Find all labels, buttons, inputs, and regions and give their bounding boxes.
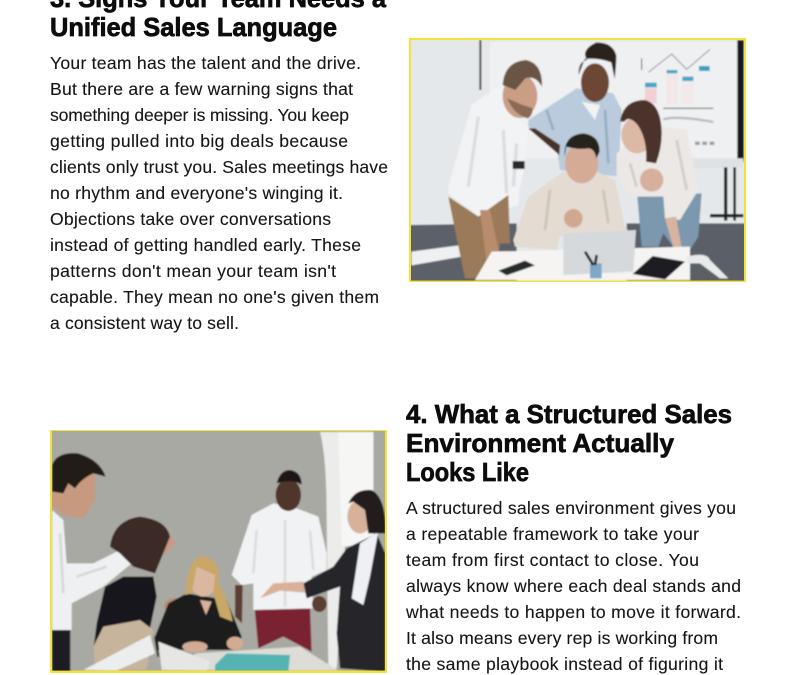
- body text: section 3: a consistent way to sell.: [50, 313, 239, 333]
- body text: section 3: something deeper is missing. You keep: [50, 105, 349, 125]
- whiteboard chart: [642, 49, 715, 143]
- heading: section 3: Unified Sales Language: [50, 12, 337, 42]
- heading: section 3: [50, 0, 387, 42]
- body text: section 4: a repeatable framework to take your: [406, 524, 699, 544]
- person: woman in black blazer: [260, 490, 385, 672]
- panel: section 4 text: [405, 399, 741, 674]
- person: man in white shirt and red trousers: [232, 470, 327, 652]
- desk with papers and folder: [83, 635, 338, 672]
- person: woman with curly hair: [93, 516, 178, 670]
- body text: section 3: [50, 53, 388, 333]
- person: man in white shirt: [448, 60, 542, 278]
- body text: section 3: clients only trust you. Sales meetings have: [50, 157, 388, 177]
- body text: section 3: patterns don't mean your team isn't: [50, 261, 336, 281]
- person: woman with brown hair: [617, 100, 702, 260]
- body text: section 4: team from first contact to close. You: [406, 550, 699, 570]
- body text: section 3: capable. They mean no one's given them: [50, 287, 379, 307]
- heading: section 4: Looks Like: [406, 457, 529, 487]
- body text: section 3: instead of getting handled early. These: [50, 235, 361, 255]
- body text: section 3: getting pulled into big deals because: [50, 131, 348, 151]
- body text: section 4: A structured sales environment gives you: [406, 498, 736, 518]
- body text: section 4: the same playbook instead of figuring it: [406, 654, 723, 674]
- photo: team around a laptop: [409, 38, 746, 282]
- panel: section 3 text: [50, 0, 388, 333]
- body text: section 3: Objections take over conversations: [50, 209, 331, 229]
- person: seated blonde woman: [155, 556, 243, 652]
- person: woman in blue shirt: [528, 42, 622, 177]
- heading: section 4: 4. What a Structured Sales: [406, 399, 732, 429]
- body text: section 4: always know where each deal stands and: [406, 576, 741, 596]
- body text: section 3: Your team has the talent and the drive.: [50, 53, 361, 73]
- heading: section 4: [406, 399, 732, 487]
- person: man with raised hand: [52, 453, 175, 672]
- body text: section 4: [405, 498, 741, 674]
- body text: section 4: It also means every rep is working from: [406, 628, 718, 648]
- body text: section 4: what needs to happen to move it forward.: [405, 602, 741, 622]
- body text: section 3: no rhythm and everyone's winging it.: [50, 183, 343, 203]
- photo: tense team meeting around a desk: [50, 430, 387, 673]
- heading: section 4: Environment Actually: [406, 428, 675, 458]
- table with devices: [475, 230, 728, 280]
- body text: section 3: But there are a few warning signs that: [50, 79, 353, 99]
- person: seated man: [513, 133, 630, 250]
